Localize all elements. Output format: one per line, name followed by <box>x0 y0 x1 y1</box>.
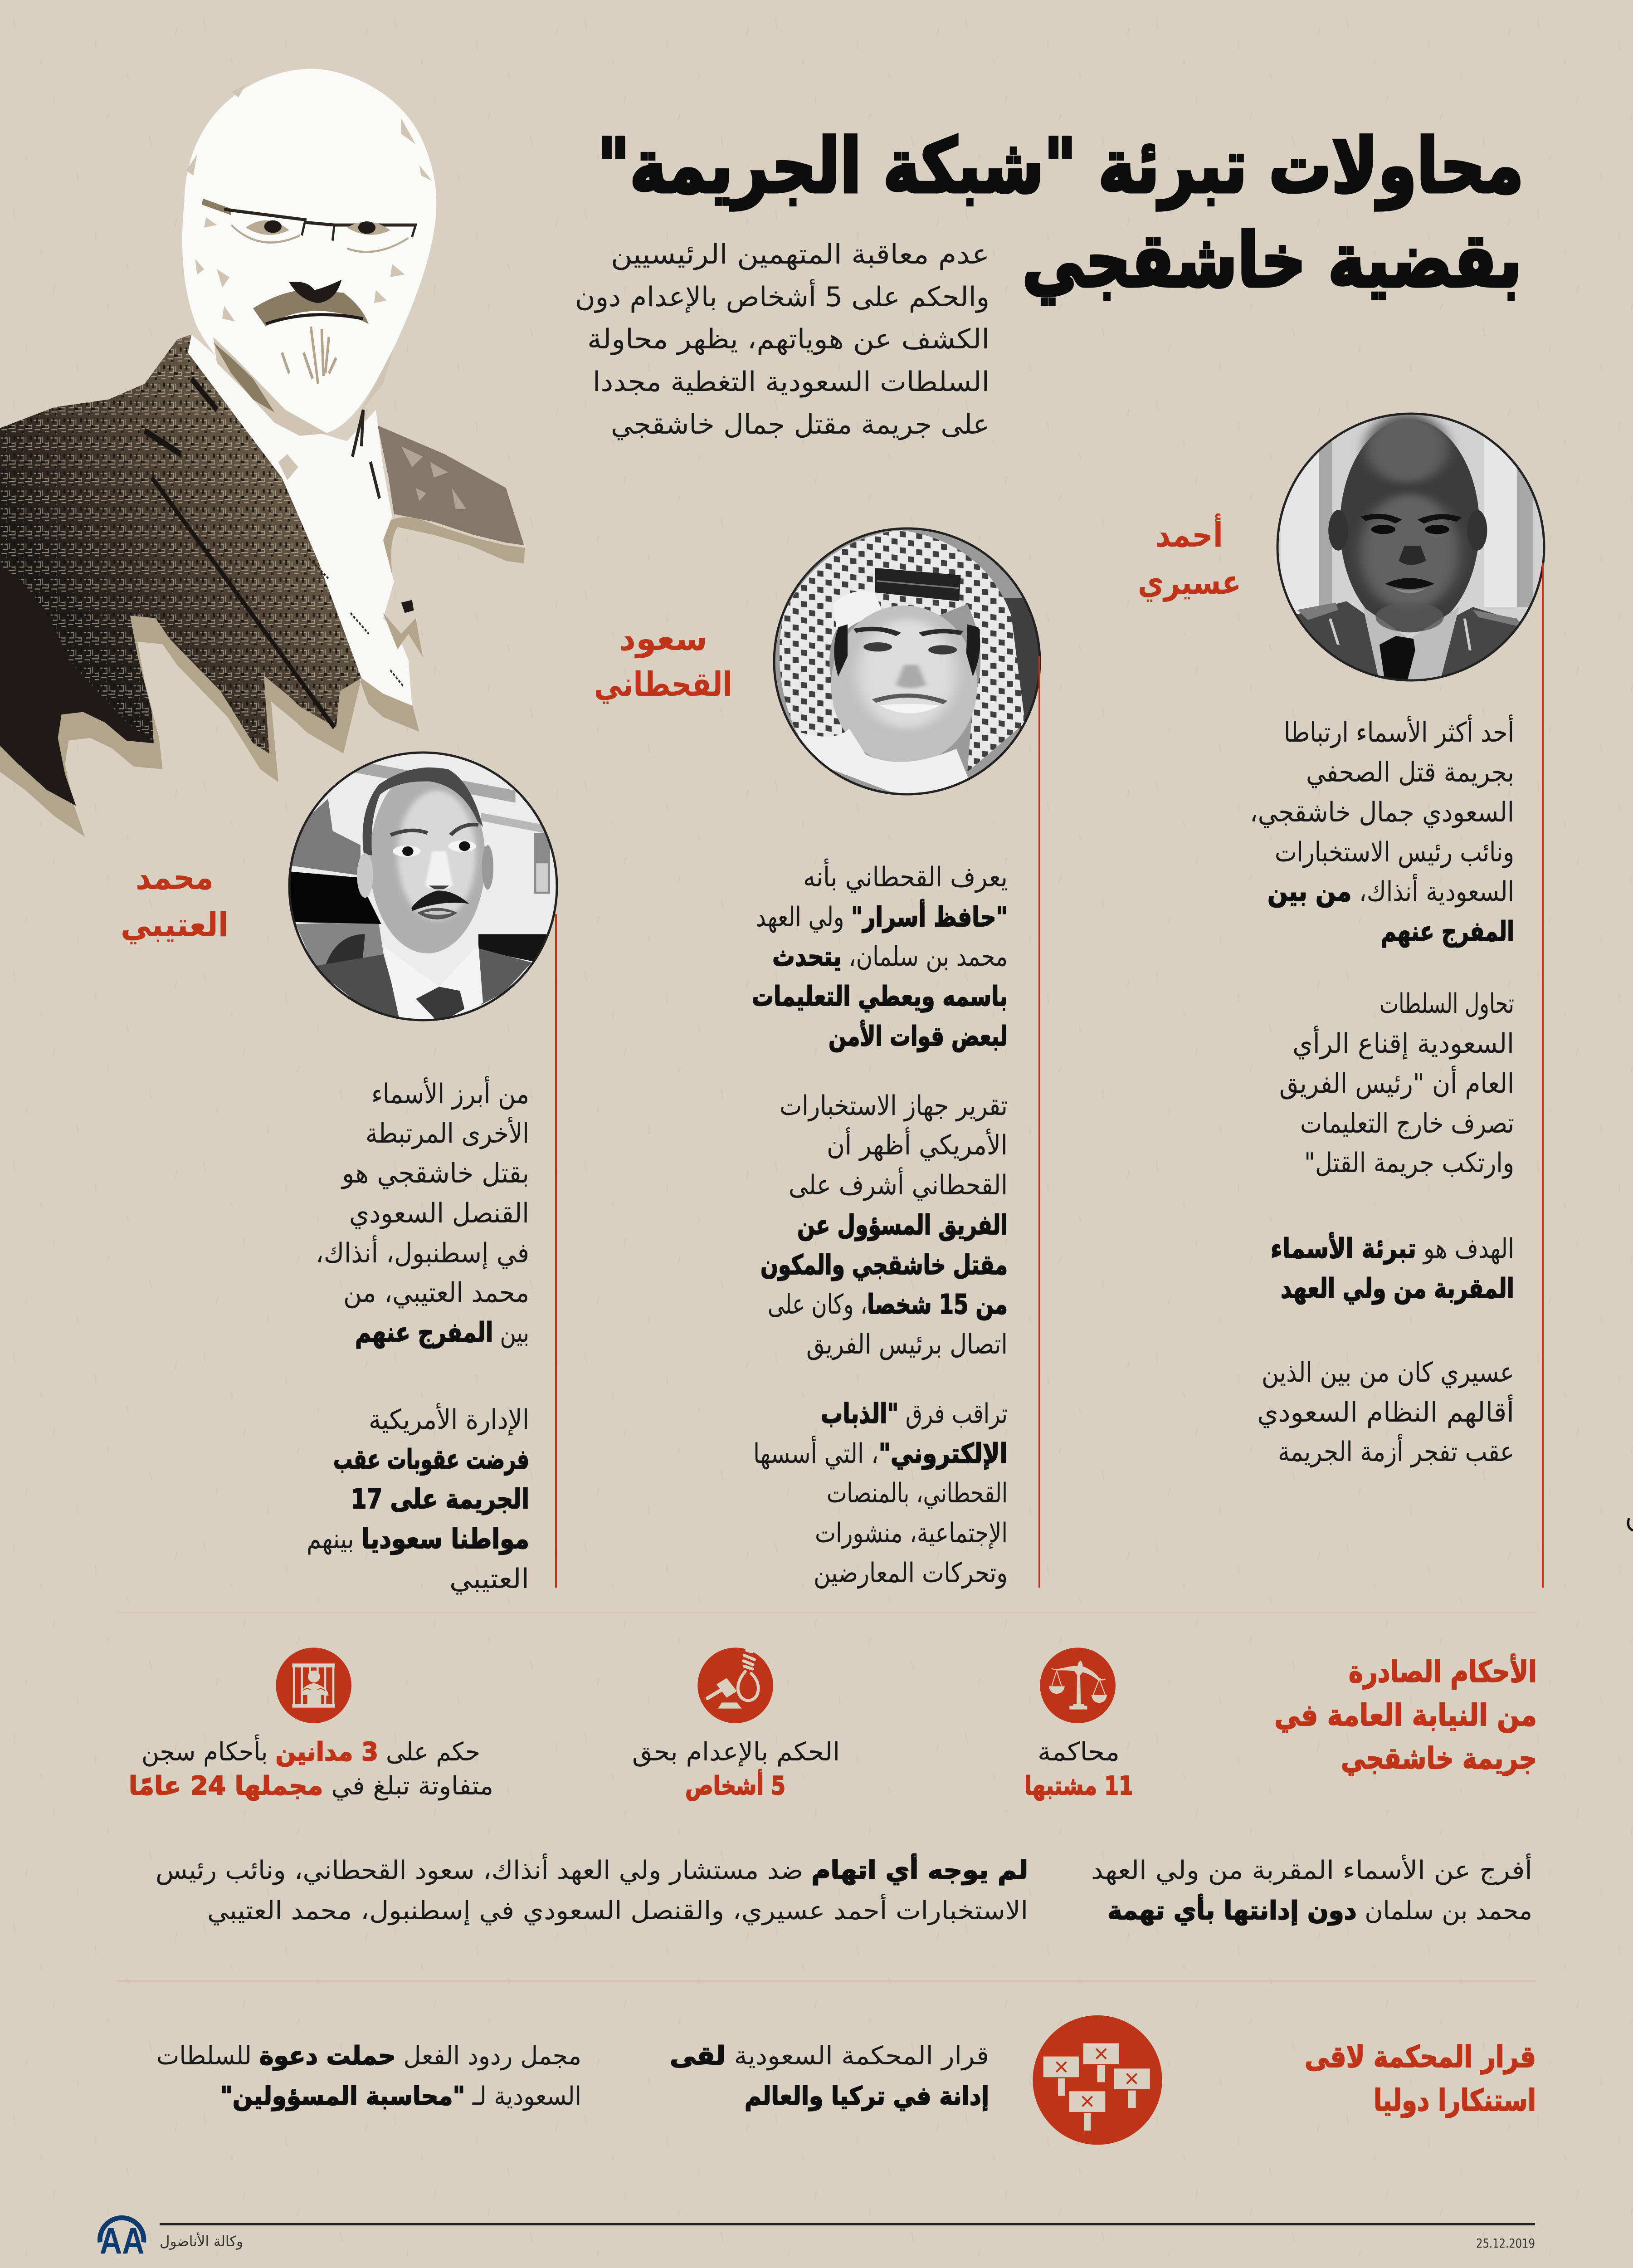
heading: international condemnation <box>1305 2039 1536 2118</box>
paragraph 2 <box>1279 988 1514 1179</box>
paragraph 2: مواطنا سعوديا بينهم <box>307 1523 529 1555</box>
text: three sentenced: حكم على 3 مدانين بأحكام سجن <box>141 1734 480 1767</box>
paragraph 3: وتحركات المعارضين <box>814 1557 1008 1589</box>
paragraph 1: محمد العتيبي، من <box>343 1277 529 1309</box>
panel: Ahmed Asiri <box>1138 405 1555 1588</box>
text: three sentenced: متفاوتة تبلغ في مجملها 24 عامًا <box>129 1771 493 1801</box>
paragraph 2: الإدارة الأمريكية <box>369 1403 529 1436</box>
paragraph 2: العتيبي <box>449 1563 529 1595</box>
glasses <box>231 225 409 252</box>
side rule <box>1542 563 1544 1588</box>
paragraph 1: المفرج عنهم <box>1381 916 1514 948</box>
head <box>182 69 436 434</box>
paragraph 3 <box>753 1398 1008 1589</box>
heading: international condemnation: قرار المحكمة لاقى <box>1305 2039 1536 2074</box>
paragraph 1: السعودي جمال خاشقجي، <box>1250 797 1514 828</box>
paragraph 1: من أبرز الأسماء <box>371 1076 529 1110</box>
paragraph 3: تراقب فرق "الذباب <box>821 1398 1008 1430</box>
name: عسيري <box>1138 563 1241 602</box>
paragraph 4: عسيري كان من بين الذين <box>1262 1357 1514 1388</box>
text: trial of 11: محاكمة <box>1038 1737 1120 1767</box>
text: condemned in Turkey: قرار المحكمة السعودية لقى <box>670 2041 989 2071</box>
logo: Anadolu Agency: AA <box>100 2220 144 2262</box>
intro text: السلطات السعودية التغطية مجددا <box>593 366 990 398</box>
text: call for accountability: مجمل ردود الفعل حملت دعوة للسلطات <box>156 2041 581 2071</box>
intro text: عدم معاقبة المتهمين الرئيسيين <box>611 239 990 270</box>
paragraph 1: بجريمة قتل الصحفي <box>1306 757 1514 788</box>
paragraph 1: بقتل خاشقجي هو <box>341 1158 529 1189</box>
heading: verdicts: الأحكام الصادرة <box>1349 1653 1537 1690</box>
paragraph 1: السعودية أنذاك، من بين <box>1267 874 1514 908</box>
heading: verdicts: من النيابة العامة في <box>1274 1698 1537 1733</box>
photo ring <box>774 528 1040 794</box>
paragraph 2: من 15 شخصا، وكان على <box>768 1289 1008 1320</box>
heading: verdicts: جريمة خاشقجي <box>1341 1741 1537 1776</box>
heading: verdicts <box>1274 1653 1537 1776</box>
text: trial of 11 <box>1024 1737 1133 1801</box>
paragraph 3: الهدف هو تبرئة الأسماء <box>1271 1232 1514 1265</box>
paragraph 1 <box>1250 714 1514 948</box>
paragraph 2: الفريق المسؤول عن <box>797 1209 1008 1241</box>
photo ring <box>289 753 557 1020</box>
text: call for accountability <box>156 2041 581 2111</box>
text: those close to crown prince released <box>1091 1853 1532 1926</box>
intro text: الكشف عن هوياتهم، يظهر محاولة <box>587 323 990 355</box>
paragraph 1: لبعض قوات الأمن <box>829 1020 1008 1052</box>
paragraph 1: في إسطنبول، أنذاك، <box>316 1235 529 1269</box>
text: condemned in Turkey: إدانة في تركيا والعالم <box>745 2082 989 2111</box>
name: سعود <box>619 619 707 659</box>
paragraph 2: تصرف خارج التعليمات <box>1300 1108 1514 1139</box>
text: execution of 5: 5 أشخاص <box>685 1769 785 1801</box>
paragraph 2: تقرير جهاز الاستخبارات <box>780 1090 1008 1122</box>
name <box>121 858 229 944</box>
photo: Asiri <box>1279 415 1543 679</box>
shirt <box>188 334 412 706</box>
icon: scales <box>1040 1647 1116 1723</box>
name <box>594 619 732 704</box>
nose and moustache <box>253 290 369 327</box>
title: بقضية خاشقجي <box>1022 217 1522 305</box>
jaw shading <box>213 337 394 436</box>
illustration: Jamal Khashoggi portrait <box>0 69 525 837</box>
paragraph 2 <box>307 1403 529 1595</box>
name: العتيبي <box>121 905 229 944</box>
paragraph 1: يعرف القحطاني بأنه <box>803 858 1008 893</box>
paragraph 1: "حافظ أسرار" ولي العهد <box>756 899 1008 933</box>
icon: gavel and noose <box>697 1647 773 1723</box>
intro text: والحكم على 5 أشخاص بالإعدام دون <box>575 279 990 313</box>
text: those close to crown prince released: محمد بن سلمان دون إدانتها بأي تهمة <box>1107 1894 1532 1926</box>
paragraph 3: الإجتماعية، منشورات <box>815 1517 1008 1549</box>
photo: Qahtani <box>775 530 1038 793</box>
paragraph 1 <box>316 1076 529 1349</box>
heading: international condemnation: استنكارا دوليا <box>1374 2083 1536 2118</box>
paragraph 3: الإلكتروني"، التي أسسها <box>753 1436 1008 1470</box>
paragraph 1: بين المفرج عنهم <box>355 1317 529 1349</box>
paragraph 4: عقب تفجر أزمة الجريمة <box>1278 1434 1514 1468</box>
paragraph 3: القحطاني، بالمنصات <box>827 1477 1008 1509</box>
date: 25.12.2019 <box>1476 2236 1535 2251</box>
paragraph 2: مقتل خاشقجي والمكون <box>760 1249 1008 1281</box>
paragraph 3: المقربة من ولي العهد <box>1281 1273 1514 1305</box>
text: trial of 11: 11 مشتبها <box>1024 1771 1133 1801</box>
paragraph 1: محمد بن سلمان، يتحدث <box>772 941 1008 973</box>
photo ring <box>1277 414 1544 680</box>
text: no charges: الاستخبارات أحمد عسيري، والقنصل السعودي في إسطنبول، محمد العتيبي <box>207 1894 1028 1926</box>
side rule <box>555 914 557 1588</box>
agency name: وكالة الأناضول <box>160 2232 243 2250</box>
paragraph 1: ونائب رئيس الاستخبارات <box>1275 836 1514 868</box>
title <box>597 122 1524 305</box>
text: execution of 5 <box>632 1737 840 1801</box>
paragraph 2: السعودية إقناع الرأي <box>1292 1026 1514 1060</box>
paragraph 1: القنصل السعودي <box>349 1198 529 1229</box>
paragraph 2: تحاول السلطات <box>1380 988 1514 1020</box>
side rule <box>1038 656 1040 1588</box>
paragraph 4 <box>1257 1357 1514 1468</box>
paragraph 3 <box>1271 1232 1514 1305</box>
text: execution of 5: الحكم بالإعدام بحق <box>632 1737 840 1767</box>
panel: Mohammed al-Otaibi <box>121 750 561 1595</box>
name: محمد <box>136 858 214 897</box>
text: call for accountability: السعودية لـ "محاسبة المسؤولين" <box>220 2082 581 2111</box>
intro text: على جريمة مقتل جمال خاشقجي <box>611 409 990 440</box>
text: those close to crown prince released: أفرج عن الأسماء المقربة من ولي العهد <box>1091 1853 1532 1885</box>
paragraph 1: أحد أكثر الأسماء ارتباطا <box>1284 714 1514 748</box>
photo: Otaibi <box>284 750 561 1023</box>
paragraph 1 <box>752 858 1008 1052</box>
panel: Saud al-Qahtani <box>594 523 1050 1589</box>
footer rule <box>160 2223 1535 2225</box>
icon: protest placards <box>1033 2015 1162 2145</box>
paragraph 2: الجريمة على 17 <box>351 1483 529 1515</box>
text: no charges: لم يوجه أي اتهام ضد مستشار ولي العهد أنذاك، سعود القحطاني، ونائب رئيس <box>156 1853 1028 1885</box>
paragraph 2: فرضت عقوبات عقب <box>333 1444 529 1476</box>
name: القحطاني <box>594 665 732 704</box>
intro text <box>575 239 990 440</box>
paragraph 2: وارتكب جريمة القتل" <box>1304 1147 1514 1179</box>
paragraph 1: الأخرى المرتبطة <box>366 1117 529 1149</box>
paragraph 1: باسمه ويعطي التعليمات <box>752 981 1008 1012</box>
icon: prisoner behind bars <box>276 1647 351 1723</box>
paragraph 2: القحطاني أشرف على <box>789 1167 1008 1201</box>
paragraph 2: اتصال برئيس الفريق <box>806 1329 1008 1360</box>
right shoulder <box>383 517 525 574</box>
paragraph 2: العام أن "رئيس الفريق <box>1279 1066 1514 1100</box>
text: no charges <box>156 1853 1028 1926</box>
text: three sentenced <box>129 1734 493 1801</box>
text: condemned in Turkey <box>670 2041 989 2111</box>
name <box>1138 513 1241 602</box>
paragraph 4: أقالهم النظام السعودي <box>1257 1394 1514 1428</box>
name: أحمد <box>1155 513 1223 555</box>
paragraph 2 <box>760 1090 1008 1360</box>
paragraph 2: الأمريكي أظهر أن <box>827 1127 1008 1161</box>
